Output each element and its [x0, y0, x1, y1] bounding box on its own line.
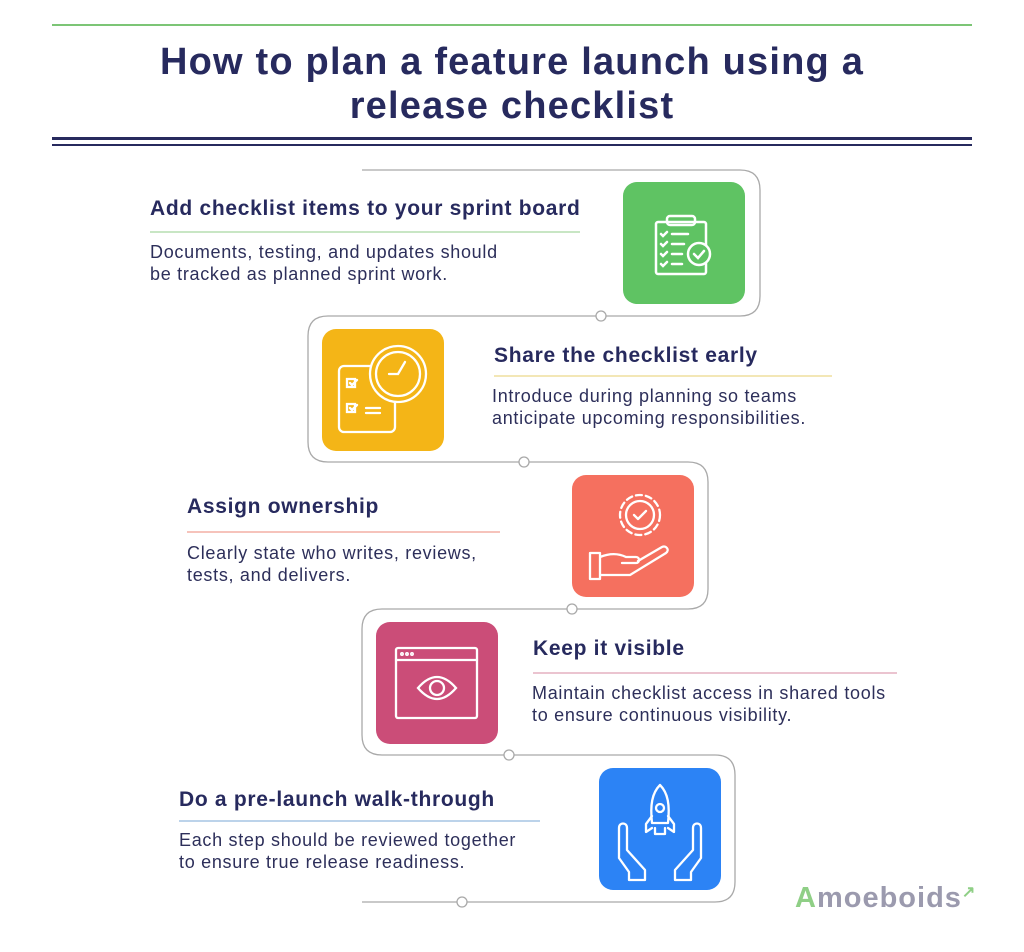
- body 1: Documents, testing, and updates should: [150, 242, 498, 262]
- icon: hands with rocket: [599, 768, 721, 890]
- top green rule: [52, 24, 972, 26]
- body 3: tests, and delivers.: [187, 564, 351, 584]
- title: How to plan a feature launch using a: [160, 41, 864, 83]
- body 1: be tracked as planned sprint work.: [150, 264, 448, 284]
- step 4: keep visible: [532, 637, 897, 725]
- step 5: pre-launch walk-through: [179, 788, 540, 872]
- title: release checklist: [350, 85, 674, 127]
- title: [160, 41, 864, 127]
- step 2: share early: [492, 344, 832, 428]
- icon: browser with eye: [376, 622, 498, 744]
- body 2: Introduce during planning so teams: [492, 386, 797, 406]
- heading 5: Do a pre-launch walk-through: [179, 788, 495, 811]
- body 5: Each step should be reviewed together: [179, 830, 516, 850]
- body 2: [492, 386, 806, 428]
- heading 4: Keep it visible: [533, 637, 685, 660]
- body 3: Clearly state who writes, reviews,: [187, 543, 477, 563]
- heading 3: Assign ownership: [187, 495, 379, 518]
- body 2: anticipate upcoming responsibilities.: [492, 408, 806, 428]
- heading 1: Add checklist items to your sprint board: [150, 197, 581, 220]
- heading 2: Share the checklist early: [494, 344, 758, 367]
- body 4: to ensure continuous visibility.: [532, 704, 792, 724]
- body 4: [532, 683, 886, 725]
- body 3: [187, 543, 477, 584]
- body 4: Maintain checklist access in shared tools: [532, 683, 886, 703]
- icon: clipboard checklist: [623, 182, 745, 304]
- icon: checklist with clock: [322, 329, 444, 451]
- step 3: assign ownership: [187, 495, 500, 584]
- icon: hand with gear: [572, 475, 694, 597]
- bottom navy double rule: [52, 137, 972, 146]
- logo: Amoeboids: Amoeboids↗: [795, 882, 976, 914]
- step 1: add checklist items: [150, 197, 581, 284]
- body 5: [179, 830, 516, 872]
- body 5: to ensure true release readiness.: [179, 852, 465, 872]
- body 1: [150, 242, 498, 284]
